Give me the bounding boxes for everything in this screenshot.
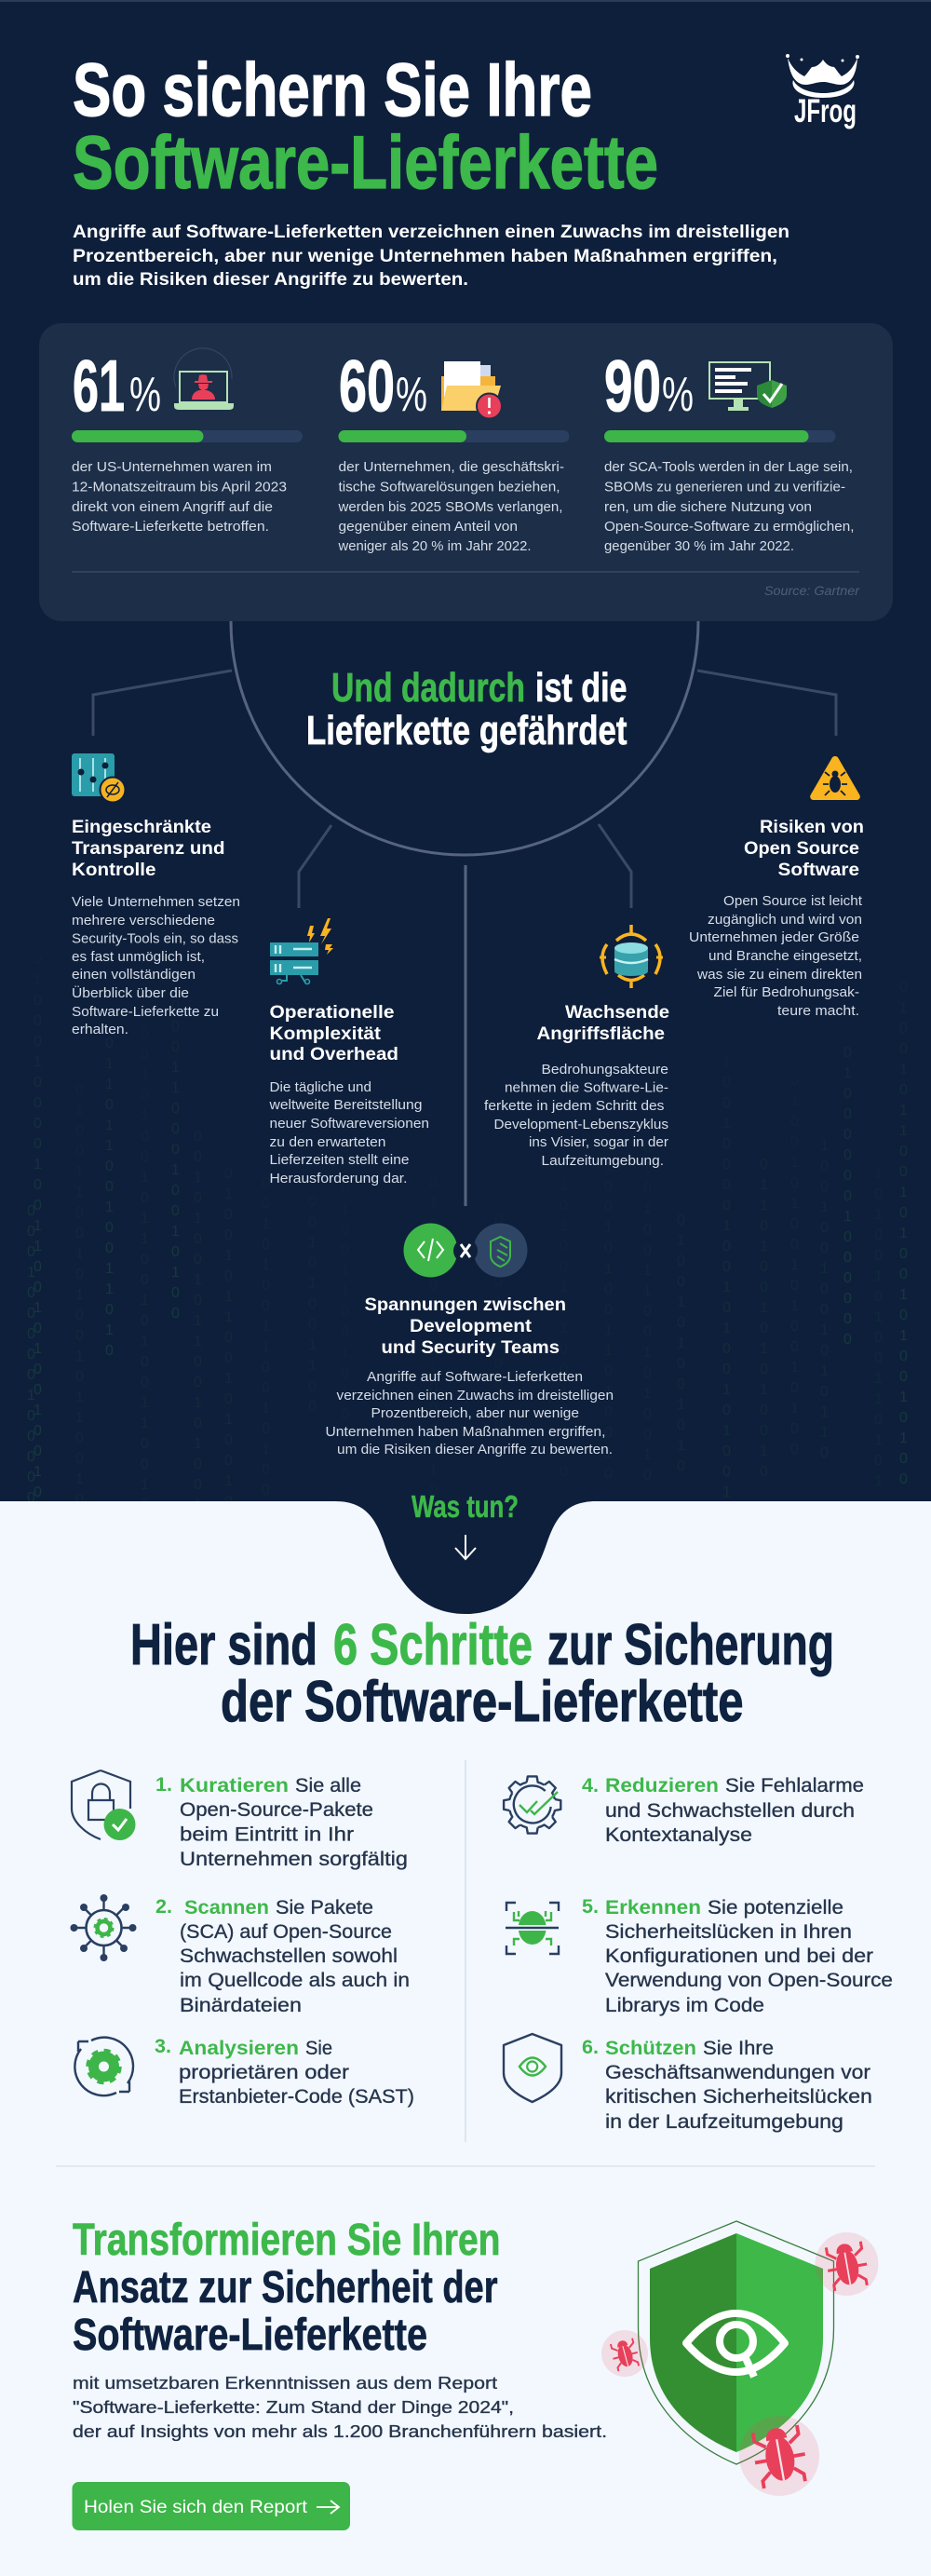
matrix rain background: 0010100110010100 (262, 1175, 270, 1498)
stat 61 percent: der US-Unternehmen waren im (72, 460, 272, 475)
risk: open source: was sie zu einem direkten (696, 968, 862, 983)
icon: shield with eye (504, 2034, 561, 2102)
risk: open source: Open Source ist leicht (723, 894, 862, 909)
risk: operational complexity: Die tägliche und (270, 1080, 371, 1095)
icon: bug scanner (506, 1903, 559, 1954)
risk: dev and security tension: Angriffe auf Software-Lieferketten (367, 1370, 583, 1385)
intro text: um die Risiken dieser Angriffe zu bewerten. (73, 270, 468, 290)
step 1: 1. (155, 1773, 172, 1796)
matrix rain background: 01001010010 (494, 1213, 503, 1433)
step 4: und Schwachstellen durch (605, 1799, 855, 1822)
step 6: 6. (582, 2036, 599, 2058)
risk: operational complexity: neuer Softwareversionen (270, 1117, 429, 1132)
matrix rain background: 0010100101100101001100101001 (141, 1026, 149, 1595)
risk: attack surface: nehmen die Software-Lie- (505, 1080, 668, 1095)
risk: visibility and control: Transparenz und (72, 838, 225, 859)
stat 60 percent: tische Softwarelösungen beziehen, (339, 481, 560, 495)
risk: attack surface: Laufzeitumgebung. (542, 1154, 664, 1169)
icon: gear with cycle arrows (74, 2038, 133, 2095)
matrix rain background: 0100101001010 (677, 1213, 685, 1474)
matrix rain background: 0110100101010010 (760, 1157, 768, 1480)
stat 61 percent: 61 (73, 345, 125, 427)
title (73, 48, 658, 205)
risk: dev and security tension: Prozentbereich, aber nur wenige (371, 1406, 579, 1421)
risk: dev and security tension: und Security Teams (382, 1337, 560, 1358)
closing text: "Software-Lieferkette: Zum Stand der Dinge 2024", (73, 2397, 514, 2417)
matrix rain background: 0101001010010100 (560, 1157, 568, 1480)
matrix rain background: 00101001011001010010110 (194, 1129, 202, 1595)
step 2: (SCA) auf Open-Source (180, 1920, 392, 1943)
icon: shield with lock (72, 1770, 136, 1840)
matrix rain background: 0100010000100110010100100101 (34, 952, 42, 1521)
step 5: Librarys im Code (605, 1994, 764, 2016)
stat 60 percent: 60 (339, 345, 395, 427)
stat 61 percent: % (129, 368, 161, 422)
risk: visibility and control: es fast unmöglich ist, (72, 950, 205, 965)
risk: dev and security tension: Unternehmen haben Maßnahmen ergriffen, (326, 1425, 605, 1440)
section heading: threat: Lieferkette gefährdet (306, 708, 627, 753)
stat 60 percent: gegenüber einem Anteil von (339, 520, 518, 535)
risk: dev and security tension: um die Risiken dieser Angriffe zu bewerten. (337, 1443, 613, 1457)
matrix rain background: 10010000100101001010010110 (722, 1054, 731, 1582)
risk: visibility and control: Kontrolle (72, 860, 156, 880)
risk: attack surface: ferkette in jedem Schritt des (484, 1099, 665, 1114)
stat 60 percent: der Unternehmen, die geschäftskri- (339, 460, 564, 475)
intro text (73, 223, 789, 290)
step 4: Kontextanalyse (605, 1824, 752, 1846)
step 1: Sie alle (295, 1774, 361, 1796)
matrix rain background: 000100000100000010 (27, 1203, 35, 1567)
step 6: Geschäftsanwendungen vor (605, 2061, 870, 2083)
step 6: kritischen Sicherheitslücken (605, 2085, 872, 2108)
risk: dev and security tension: verzeichnen einen Zuwachs im dreistelligen (337, 1389, 614, 1403)
risk: operational complexity: Lieferzeiten stellt eine (270, 1153, 410, 1168)
stat 90 percent (604, 345, 855, 554)
panel: statistics (39, 323, 893, 621)
matrix rain background: 00101001100 (308, 1194, 317, 1415)
closing text (73, 2373, 607, 2441)
risk: attack surface: Wachsende (565, 1002, 669, 1023)
step 6: in der Laufzeitumgebung (605, 2110, 843, 2133)
risk: open source: teure macht. (777, 1004, 859, 1019)
heading: six steps (130, 1613, 834, 1734)
matrix rain background: 010010110010100101 (224, 1166, 233, 1530)
risk: visibility and control: Überblick über die (72, 984, 189, 1001)
risk: attack surface (484, 925, 669, 1169)
heading: six steps: zur Sicherung (547, 1613, 834, 1677)
icon: network with gear (71, 1894, 136, 1961)
matrix rain background: 0010100110010100 (341, 1119, 349, 1443)
risk: operational complexity: Komplexität (270, 1024, 382, 1044)
risk: visibility and control: Viele Unternehmen setzen (72, 895, 240, 910)
matrix rain background (28, 1021, 907, 1501)
step 6 (504, 2034, 872, 2133)
step 3: Sie (305, 2037, 332, 2059)
closing heading (73, 2216, 501, 2360)
risk: attack surface: Angriffsfläche (536, 1024, 665, 1044)
step 6: Sie Ihre (703, 2037, 774, 2059)
section heading: threat (306, 665, 627, 753)
step 5 (506, 1895, 893, 2016)
matrix rain background: 0100101100101001010010100 (899, 980, 908, 1487)
button: get the report: Holen Sie sich den Report (84, 2497, 308, 2517)
risk: visibility and control: mehrere verschiedene (72, 914, 215, 929)
arc and center line (231, 621, 698, 1206)
stat 90 percent: % (662, 368, 694, 422)
icon: gear with double check (504, 1776, 560, 1834)
stat 90 percent: 90 (604, 345, 661, 427)
stat 90 percent: SBOMs zu generieren und zu verifizie- (604, 481, 845, 495)
step 5: 5. (582, 1895, 599, 1918)
risk: operational complexity: Herausforderung dar. (270, 1172, 408, 1186)
matrix rain background: 001010011001010010 (643, 1119, 652, 1484)
risk: open source: Ziel für Bedrohungsak- (713, 985, 859, 1000)
logo: JFrog (786, 54, 859, 129)
matrix rain background: 0101001011001010 (429, 1175, 438, 1498)
step 2: Binärdateien (180, 1994, 302, 2016)
risk: operational complexity (268, 918, 429, 1186)
step 3 (74, 2035, 414, 2108)
section heading: threat: ist die (535, 665, 627, 711)
step 5: Erkennen (605, 1896, 701, 1918)
risk: visibility and control: erhalten. (72, 1023, 128, 1037)
step 1: Unternehmen sorgfältig (180, 1848, 408, 1870)
step 5: Konfigurationen und bei der (605, 1945, 873, 1967)
stat 61 percent: direkt von einem Angriff auf die (72, 500, 273, 515)
illustration: shield with eye and bugs (601, 2221, 879, 2496)
callout: Was tun: Was tun? (412, 1489, 519, 1524)
risk: dev and security tension: Spannungen zwischen (365, 1295, 566, 1315)
stat 61 percent: Software-Lieferkette betroffen. (72, 520, 269, 535)
step 1: Kuratieren (180, 1774, 289, 1796)
icon: servers with lightning (270, 918, 333, 983)
step 2: 2. (155, 1895, 172, 1918)
closing heading: Transformieren Sie Ihren (73, 2216, 501, 2265)
icon: database with target brackets (600, 925, 663, 988)
risk: operational complexity: weltweite Bereitstellung (268, 1098, 423, 1113)
matrix rain background: 1001001001010110 (820, 1138, 829, 1461)
title: So sichern Sie Ihre (73, 48, 592, 132)
heading: six steps: 6 Schritte (333, 1613, 533, 1677)
step 2: Scannen (184, 1896, 269, 1918)
button: get the report (73, 2482, 350, 2530)
risk: visibility and control (72, 753, 240, 1037)
stat 60 percent: weniger als 20 % im Jahr 2022. (337, 539, 531, 554)
risk: open source: Unternehmen jeder Größe (689, 930, 859, 945)
heading: six steps: der Software-Lieferkette (221, 1670, 743, 1734)
icon: warning triangle with bug (810, 756, 860, 800)
intro text: Prozentbereich, aber nur wenige Unternehmen haben Maßnahmen ergriffen, (73, 247, 777, 266)
closing text: mit umsetzbaren Erkenntnissen aus dem Report (73, 2373, 497, 2393)
step 4 (504, 1774, 864, 1846)
risk: open source: Risiken von (760, 817, 864, 837)
light section background with drop (0, 1501, 931, 2576)
step 2: im Quellcode als auch in (180, 1969, 410, 1991)
risk: visibility and control: einen vollständigen (72, 968, 196, 983)
risk: dev and security tension: Development (410, 1316, 533, 1336)
step 3: Erstanbieter-Code (SAST) (179, 2085, 414, 2108)
risk: attack surface: ins Visier, sogar in der (529, 1135, 668, 1150)
risk: visibility and control: Eingeschränkte (72, 817, 211, 837)
arrow: down (455, 1535, 476, 1559)
closing heading: Ansatz zur Sicherheit der (73, 2263, 497, 2312)
step 5: Sie potenzielle (708, 1896, 843, 1918)
stat 60 percent: werden bis 2025 SBOMs verlangen, (337, 500, 562, 515)
risk: open source: Software (778, 860, 859, 880)
step 2: Schwachstellen sowohl (180, 1945, 398, 1967)
step 4: Reduzieren (605, 1774, 719, 1796)
title: Software-Lieferkette (73, 121, 658, 205)
closing text: der auf Insights von mehr als 1.200 Branchenführern basiert. (73, 2421, 607, 2441)
connector lines from arc to columns (93, 671, 836, 908)
risk: operational complexity: und Overhead (270, 1044, 398, 1064)
step 5: Verwendung von Open-Source (605, 1969, 893, 1991)
step 2 (71, 1894, 410, 2016)
icon: code vs shield (404, 1224, 527, 1278)
step 3: Analysieren (179, 2037, 299, 2059)
matrix rain background: 1010010100110101 (874, 1166, 883, 1489)
risk: visibility and control: Software-Lieferkette zu (72, 1005, 219, 1020)
heading: six steps: Hier sind (130, 1613, 317, 1677)
matrix rain background: 010000001000000 (843, 1045, 852, 1348)
risk: open source: Open Source (744, 838, 859, 859)
risk: visibility and control: Security-Tools ein, so dass (72, 931, 238, 946)
matrix rain background: 01001010011010010 (604, 1138, 613, 1482)
step 1: beim Eintritt in Ihr (180, 1824, 354, 1846)
section heading: threat: Und dadurch (331, 665, 525, 711)
source note: Source: Gartner (764, 583, 860, 598)
step 3: proprietären oder (179, 2061, 349, 2083)
risk: operational complexity: zu den erwarteten (270, 1135, 385, 1150)
step 1: Open-Source-Pakete (180, 1798, 373, 1821)
logo: JFrog: JFrog (794, 93, 857, 129)
risk: open source (689, 756, 864, 1019)
stat 61 percent (72, 340, 303, 535)
matrix rain background: 0001100010010100 (171, 998, 180, 1322)
step 1 (72, 1770, 408, 1870)
risk: open source: zugänglich und wird von (708, 913, 862, 928)
stat 90 percent: ren, um die sichere Nutzung von (604, 500, 812, 515)
step 2: Sie Pakete (276, 1896, 373, 1918)
matrix rain background: 0100101001010010100 (790, 1073, 799, 1457)
risk: open source: und Branche eingesetzt, (708, 949, 862, 964)
top strip (0, 0, 931, 2)
risk: attack surface: Development-Lebenszyklus (493, 1118, 668, 1132)
matrix rain background: 01001100101001011001010010 (75, 1082, 84, 1610)
risk: dev and security tension (326, 1224, 614, 1457)
step 4: 4. (582, 1774, 599, 1796)
step 3: 3. (155, 2035, 171, 2057)
stat 90 percent: der SCA-Tools werden in der Lage sein, (604, 460, 853, 475)
stat 61 percent: 12-Monatszeitraum bis April 2023 (72, 481, 287, 495)
step 5: Sicherheitslücken in Ihren (605, 1920, 852, 1943)
matrix rain background: 0110110010011010 (105, 1036, 114, 1359)
risk: attack surface: Bedrohungsakteure (542, 1063, 668, 1078)
intro text: Angriffe auf Software-Lieferketten verzeichnen einen Zuwachs im dreistelligen (73, 223, 789, 242)
stat 60 percent (337, 345, 570, 554)
closing heading: Software-Lieferkette (73, 2311, 427, 2360)
risk: operational complexity: Operationelle (270, 1002, 395, 1023)
step 6: Schützen (605, 2037, 696, 2059)
icon: sliders with hidden eye (72, 753, 125, 803)
stat 90 percent: gegenüber 30 % im Jahr 2022. (604, 539, 794, 554)
step 4: Sie Fehlalarme (725, 1774, 864, 1796)
stat 60 percent: % (396, 368, 427, 422)
stat 90 percent: Open-Source-Software zu ermöglichen, (604, 520, 855, 535)
